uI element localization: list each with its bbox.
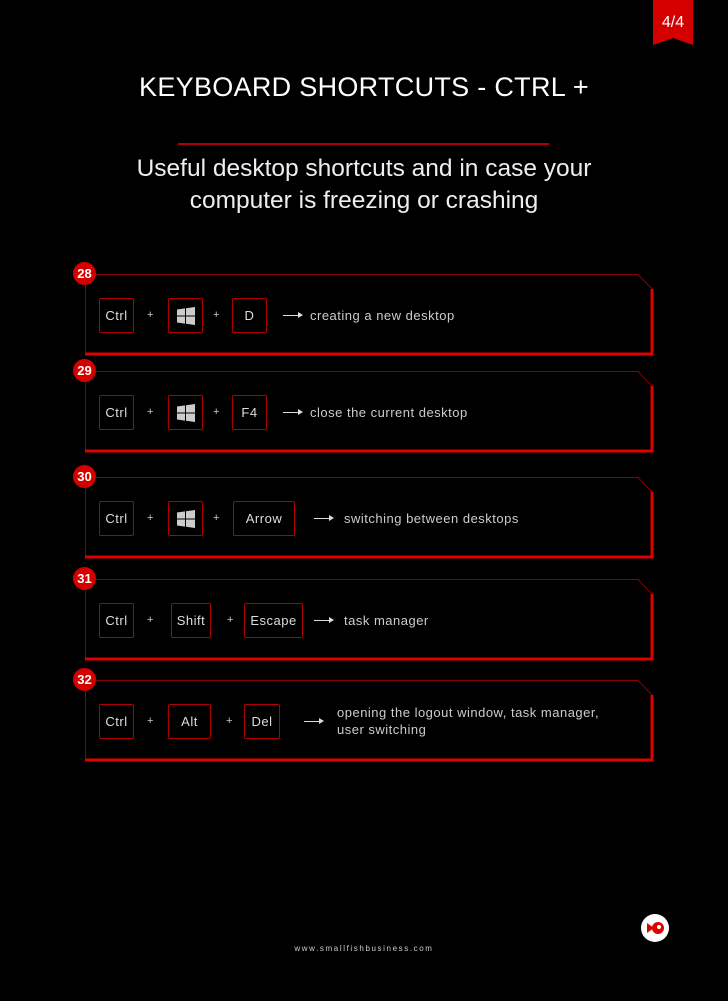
text: 28: [77, 266, 92, 281]
card 31: Ctrl: [105, 613, 128, 628]
divider: [178, 143, 549, 145]
card 32: user switching: [337, 722, 426, 737]
page badge 4/4: [653, 0, 693, 45]
card 32: opening the logout window, task manager,: [337, 705, 599, 720]
card 28: +: [147, 309, 153, 321]
card 31: task manager: [344, 613, 429, 628]
card 29: [73, 359, 654, 452]
card 32: +: [147, 715, 153, 727]
card 32: Ctrl: [105, 714, 128, 729]
footer url: www.smallfishbusiness.com: [294, 944, 434, 953]
card 29: Ctrl: [105, 405, 128, 420]
card 29: close the current desktop: [310, 405, 468, 420]
subtitle: Useful desktop shortcuts and in case your: [137, 155, 591, 182]
card 30: Ctrl: [105, 511, 128, 526]
card 32: Alt: [181, 714, 198, 729]
card 31: Shift: [177, 613, 205, 628]
card 30: Arrow: [246, 511, 282, 526]
card 32: Del: [251, 714, 272, 729]
card 31: +: [147, 614, 153, 626]
text: 29: [77, 363, 92, 378]
card 32: +: [226, 715, 232, 727]
text: 31: [77, 571, 92, 586]
card 31: Escape: [250, 613, 297, 628]
card 28: [73, 262, 654, 356]
card 28: Ctrl: [105, 308, 128, 323]
card 30: +: [213, 512, 219, 524]
text: 32: [77, 672, 92, 687]
card 32: [73, 668, 654, 762]
text: 30: [77, 469, 92, 484]
card 31: +: [227, 614, 233, 626]
card 30: switching between desktops: [344, 511, 519, 526]
card 29: F4: [241, 405, 258, 420]
card 28: creating a new desktop: [310, 308, 455, 323]
card 28: D: [245, 308, 254, 323]
card 29: +: [147, 406, 153, 418]
page badge 4/4: 4/4: [662, 14, 684, 31]
card 30: +: [147, 512, 153, 524]
card 31: [73, 567, 654, 660]
subtitle: [137, 155, 591, 214]
card 29: +: [213, 406, 219, 418]
logo: [641, 914, 669, 942]
subtitle: computer is freezing or crashing: [190, 187, 538, 214]
title: KEYBOARD SHORTCUTS - CTRL +: [139, 72, 589, 102]
card 28: +: [213, 309, 219, 321]
card 30: [73, 465, 654, 558]
